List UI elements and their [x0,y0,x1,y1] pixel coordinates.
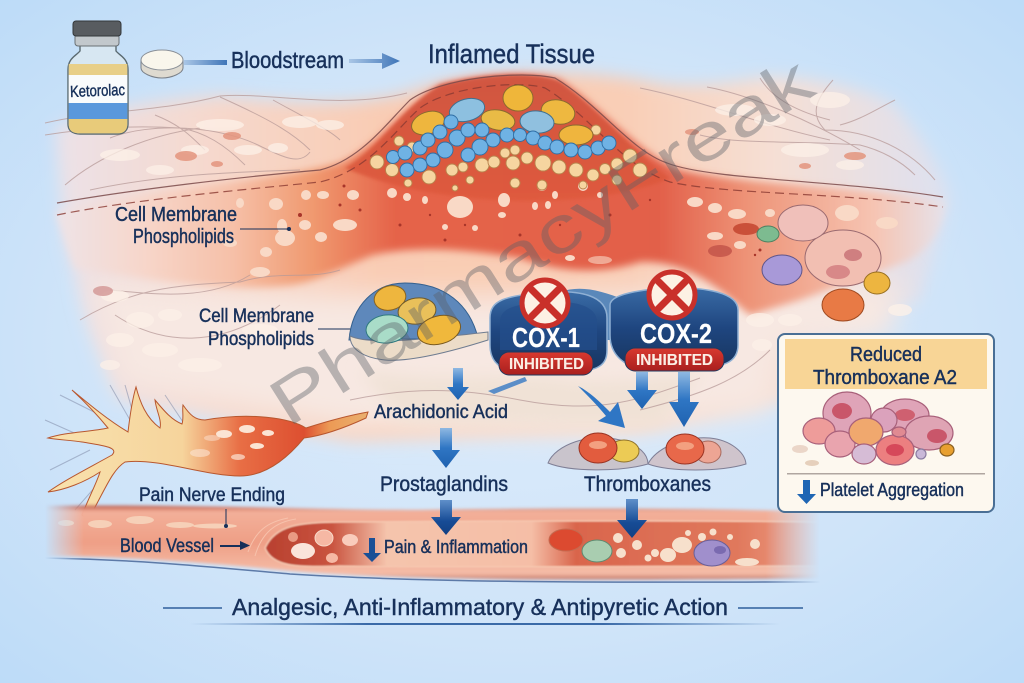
skin cell lines [45,78,935,410]
COX-1 enzyme [490,280,607,375]
immune cells cluster [370,85,647,191]
pale skin highlights [100,92,912,372]
arrow: arachidonic acid to prostaglandins [432,428,460,468]
watermark: PharmacyFreak [256,42,827,440]
arrow: phospholipids to arachidonic acid [447,368,469,400]
platelet cluster left [548,433,648,470]
membrane lines [57,75,943,215]
label: pain nerve ending: Pain Nerve Ending [139,484,285,506]
label: cell membrane phospholipids upper: Phospholipids [133,226,234,248]
COX-2 enzyme [610,272,738,371]
COX-2 inhibit icon [649,272,695,318]
COX-2 inhibited badge: INHIBITED [636,352,713,369]
icon: tablet [141,50,183,78]
COX-1 inhibit icon [522,280,568,326]
label: pain and inflammation: Pain & Inflammation [384,537,528,557]
panel: inflamed tissue [45,73,950,440]
skin tissue layer [55,73,950,440]
label: platelet aggregation: Platelet Aggregation [820,480,964,500]
lower tissue beige patch [360,370,700,425]
label: thromboxanes: Thromboxanes [584,473,711,496]
dark tissue dots [298,184,762,256]
tissue specks [223,175,898,277]
arrow: COX-2 to thromboxanes right [669,372,699,427]
platelet cluster right [648,434,746,470]
label: cell membrane phospholipids lower: Cell Membrane [199,306,314,327]
arrow: prostaglandins down [431,500,461,535]
arrow: bloodstream to tissue [349,53,400,69]
panel header [785,339,987,389]
label: cell membrane phospholipids upper [115,204,291,248]
vial label: Ketorolac [70,82,125,101]
panel: reduced thromboxane A2 [778,334,994,512]
vessel bottom edge [45,558,820,582]
inflamed dome [345,75,670,201]
COX-1 inhibited badge: INHIBITED [509,356,584,373]
vessel lumen [265,521,820,567]
blue bead cells [386,115,616,177]
arrow: COX-1 to thromboxanes [578,386,625,428]
label: cell membrane phospholipids upper: Cell Membrane [115,204,237,226]
right tissue cells [757,205,890,321]
blood cells [58,516,760,566]
title: inflamed tissue: Inflamed Tissue [428,39,595,69]
arrow: thromboxanes down [617,499,647,538]
label: prostaglandins: Prostaglandins [380,473,508,496]
label: arachidonic acid: Arachidonic Acid [374,402,508,423]
down arrow [797,480,816,504]
arrow stub from COX-1 [488,377,527,394]
nerve ending [45,385,368,520]
large oval cells [408,85,593,145]
platelet aggregate illustration [792,392,954,466]
COX-2 label: COX-2 [640,318,712,349]
COX-1 label: COX-1 [512,322,580,353]
panel header: Reduced [850,344,922,366]
footer: action summary: Analgesic, Anti-Inflammatory & Antipyretic Action [232,594,728,620]
panel header: Thromboxane A2 [813,367,957,389]
label: cell membrane phospholipids lower: Phospholipids [208,329,314,350]
red inflamed band [55,75,945,315]
label: blood vessel: Blood Vessel [120,535,214,557]
blood vessel [40,506,825,582]
arrow: COX-2 to thromboxanes left [627,372,657,409]
label: cell membrane phospholipids lower [199,306,360,350]
membrane vesicle with phospholipids [349,282,488,360]
icon: ketorolac vial [68,21,128,134]
yellow bead cells [370,125,647,191]
label: pain and inflammation [363,537,528,562]
enzyme connector [560,289,625,340]
heading: bloodstream: Bloodstream [231,47,344,73]
label: pain nerve ending [139,484,285,528]
reddish spots [93,129,866,296]
pale lower tissue [90,280,900,435]
arrow: tablet to bloodstream [184,60,227,65]
